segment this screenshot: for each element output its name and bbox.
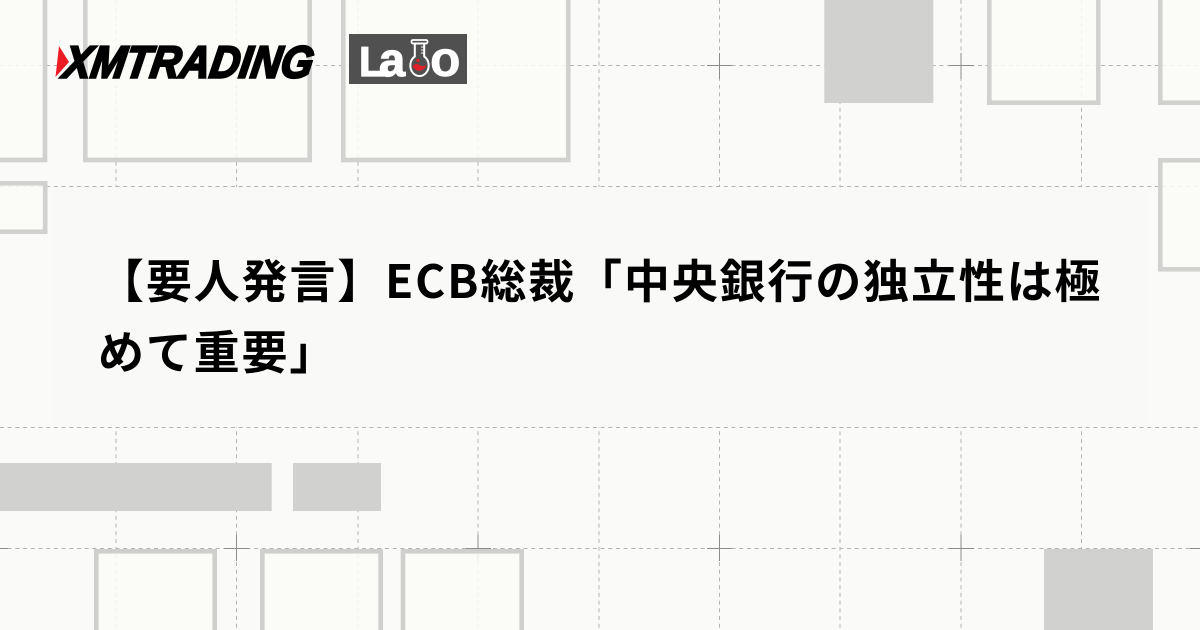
logo: Labo: [349, 31, 467, 87]
panel: outlined square bottom two: [262, 551, 381, 630]
panel: outlined square bottom one: [96, 551, 215, 630]
panel: outlined square top left: [85, 0, 310, 160]
panel: outlined square right: [1160, 160, 1200, 269]
icon: red arrowhead: [56, 46, 69, 77]
logo letters La: L: [359, 38, 385, 85]
panel: outlined square top left edge: [0, 0, 45, 160]
panel: outlined square top centre: [343, 0, 568, 160]
logo wordmark: XMTRADING: [58, 37, 317, 87]
title: めて重要」: [98, 317, 337, 383]
panel: filled block top: [824, 0, 933, 103]
icon: flask: [410, 40, 429, 76]
panel: short bar: [293, 463, 381, 511]
panel: outlined square top right edge: [1160, 0, 1200, 103]
panel: outlined square top right: [989, 0, 1098, 103]
logo letters La: a: [379, 33, 406, 86]
title: 【要人発言】ECB総裁「中央銀行の独立性は極: [98, 246, 1102, 312]
logo letter o: o: [430, 31, 461, 87]
panel: small outlined square left: [0, 183, 45, 232]
logo background: [349, 34, 467, 84]
panel: wide bar: [0, 463, 272, 511]
panel: headline backdrop: [50, 187, 1150, 427]
panel: filled block bottom: [1044, 549, 1153, 630]
title: [98, 246, 1102, 383]
panel: outlined square bottom three: [403, 551, 522, 630]
logo: XMTRADING: [56, 37, 317, 87]
